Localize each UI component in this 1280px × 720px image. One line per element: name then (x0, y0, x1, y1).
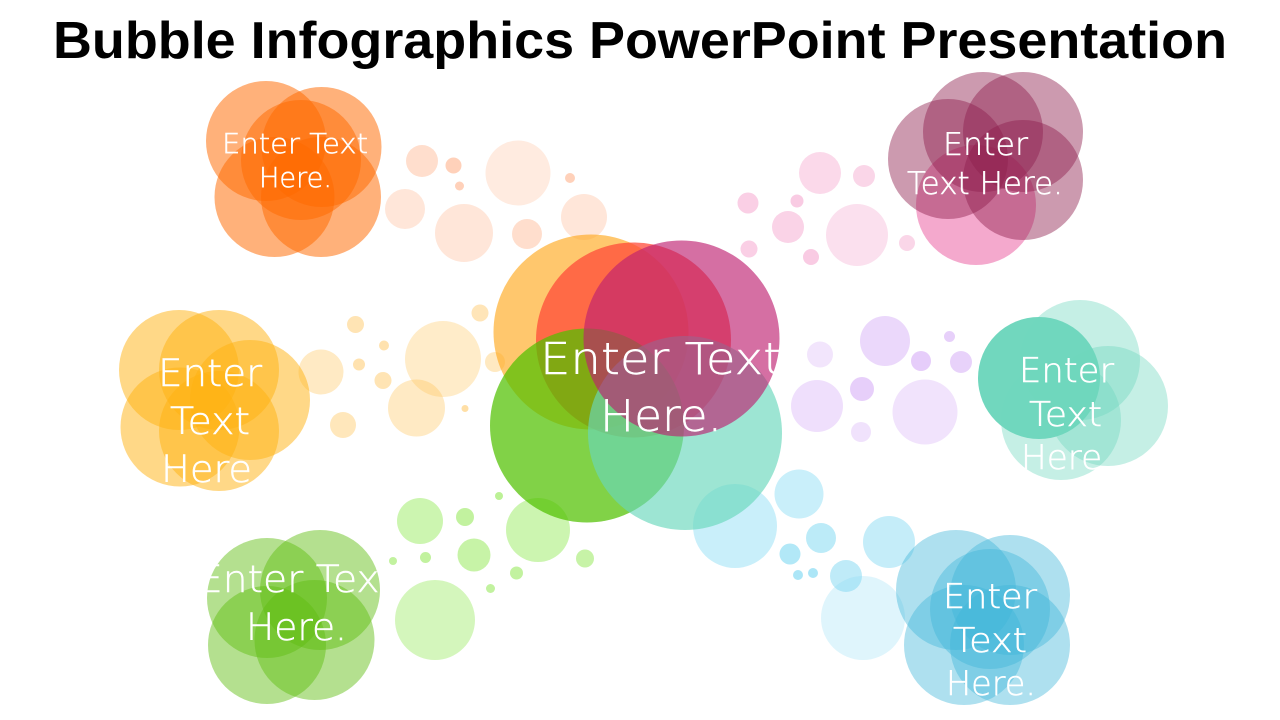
small bubbles: purple trail (791, 316, 972, 444)
central label (540, 334, 782, 442)
green label (198, 558, 395, 649)
pink bubble cluster (888, 72, 1083, 265)
pink label: Enter (943, 127, 1028, 163)
pink label: Text Here. (907, 166, 1063, 202)
green label: Here. (246, 606, 347, 649)
small bubbles: green trail (389, 492, 594, 660)
teal label (1019, 351, 1114, 478)
blue bubble cluster (896, 530, 1070, 705)
orange label (222, 127, 368, 194)
teal bubble cluster (978, 300, 1168, 480)
blue label: Here. (946, 664, 1036, 704)
orange label: Enter Text (222, 127, 368, 160)
small bubbles: orange trail (385, 140, 607, 262)
green label: Enter Text (198, 558, 395, 601)
yellow label: Enter (158, 352, 263, 395)
blue label (943, 577, 1037, 704)
small bubbles: pink trail (738, 152, 915, 266)
yellow bubble cluster (119, 310, 310, 491)
yellow label (158, 352, 263, 491)
pink label (907, 127, 1063, 202)
teal label: Text (1029, 395, 1102, 435)
yellow label: Here (161, 448, 252, 491)
teal label: Here. (1021, 438, 1113, 478)
central label: Here. (600, 391, 722, 442)
small bubbles: blue trail (693, 470, 915, 660)
small bubbles: yellow trail (298, 304, 505, 438)
central bubble cluster (490, 234, 782, 530)
title: Bubble Infographics PowerPoint Presentation (53, 12, 1227, 70)
blue label: Enter (943, 577, 1037, 617)
central label: Enter Text (540, 334, 782, 385)
orange bubble cluster (206, 81, 382, 257)
yellow label: Text (170, 400, 250, 443)
blue label: Text (953, 621, 1027, 661)
orange label: Here. (259, 161, 332, 194)
teal label: Enter (1019, 351, 1114, 391)
green bubble cluster (198, 530, 395, 704)
